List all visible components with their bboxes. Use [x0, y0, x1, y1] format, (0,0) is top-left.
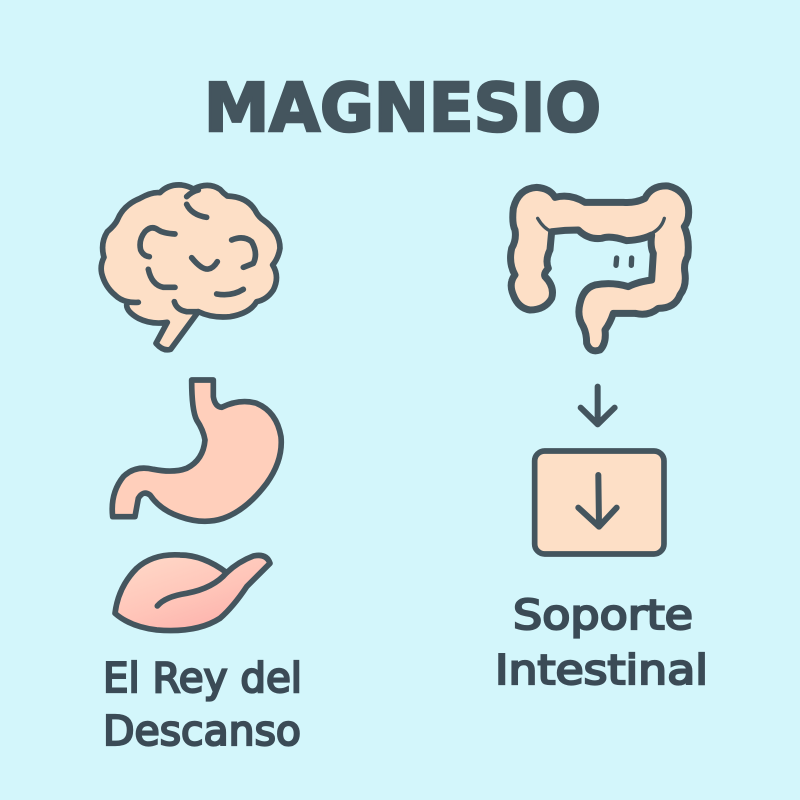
label: El Rey del Descanso: Descanso: [103, 707, 301, 755]
label: El Rey del Descanso: El Rey del: [103, 654, 302, 702]
label: Soporte Intestinal: Intestinal: [495, 646, 708, 694]
title: MAGNESIO: [204, 69, 601, 147]
icon: brain: [101, 185, 280, 350]
icon: stomach: [112, 380, 281, 521]
label: El Rey del Descanso: [103, 654, 302, 755]
icon: box with down arrow: [535, 451, 664, 554]
icon: colon: [511, 186, 689, 351]
icon: liver: [115, 555, 270, 631]
arrow: down to box: [581, 387, 615, 424]
label: Soporte Intestinal: Soporte: [513, 591, 693, 639]
label: Soporte Intestinal: [495, 591, 708, 694]
